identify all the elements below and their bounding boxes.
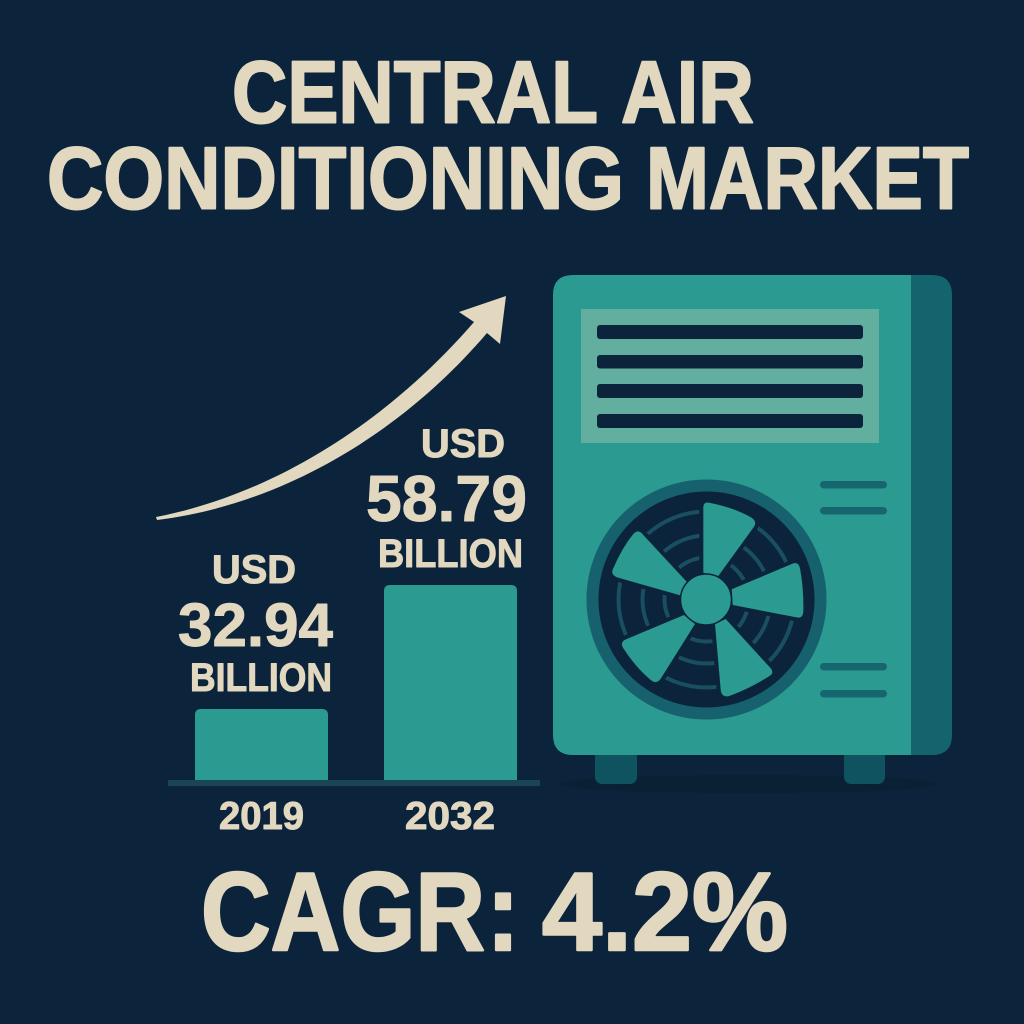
year label: 2032: 2032 bbox=[405, 795, 495, 838]
bar: 2019 bbox=[195, 709, 328, 780]
CAGR callout: : bbox=[486, 850, 520, 974]
unit shadow bbox=[559, 775, 937, 793]
fan opening bbox=[598, 492, 814, 708]
value label: 2032: USD bbox=[421, 422, 505, 466]
growth arrow bbox=[156, 296, 506, 520]
title: CONDITIONING bbox=[47, 128, 624, 228]
chart baseline bbox=[168, 780, 540, 786]
bar: 2032 bbox=[384, 585, 517, 780]
value label: 2032: 58.79 bbox=[366, 462, 527, 535]
unit foot right bbox=[844, 745, 885, 784]
icon: air conditioning unit bbox=[553, 275, 952, 793]
bar chart: market size bbox=[168, 422, 540, 838]
indicator lines upper bbox=[820, 481, 887, 514]
value label: 2019: BILLION bbox=[190, 656, 332, 700]
title bbox=[47, 42, 969, 228]
fan guard rings bbox=[618, 512, 794, 688]
fan hub bbox=[680, 574, 732, 625]
unit side panel bbox=[900, 275, 952, 755]
value label: 2019 bbox=[178, 548, 333, 700]
title: MARKET bbox=[646, 128, 969, 228]
indicator lines lower bbox=[820, 663, 887, 698]
CAGR callout bbox=[201, 850, 788, 974]
fan bbox=[586, 480, 826, 720]
value label: 2032: BILLION bbox=[378, 532, 523, 576]
fan blades bbox=[612, 503, 803, 696]
fan housing bbox=[586, 480, 826, 720]
year label: 2019: 2019 bbox=[219, 795, 304, 838]
CAGR callout: 4.2% bbox=[542, 850, 788, 974]
unit foot left bbox=[595, 745, 637, 784]
vent grille bbox=[581, 309, 879, 443]
CAGR callout: CAGR bbox=[201, 850, 485, 974]
value label: 2019: 32.94 bbox=[178, 591, 333, 659]
title: CENTRAL bbox=[232, 42, 598, 142]
title: AIR bbox=[621, 42, 754, 142]
value label: 2019: USD bbox=[212, 548, 296, 592]
unit front panel bbox=[553, 275, 911, 755]
value label: 2032 bbox=[366, 422, 527, 576]
